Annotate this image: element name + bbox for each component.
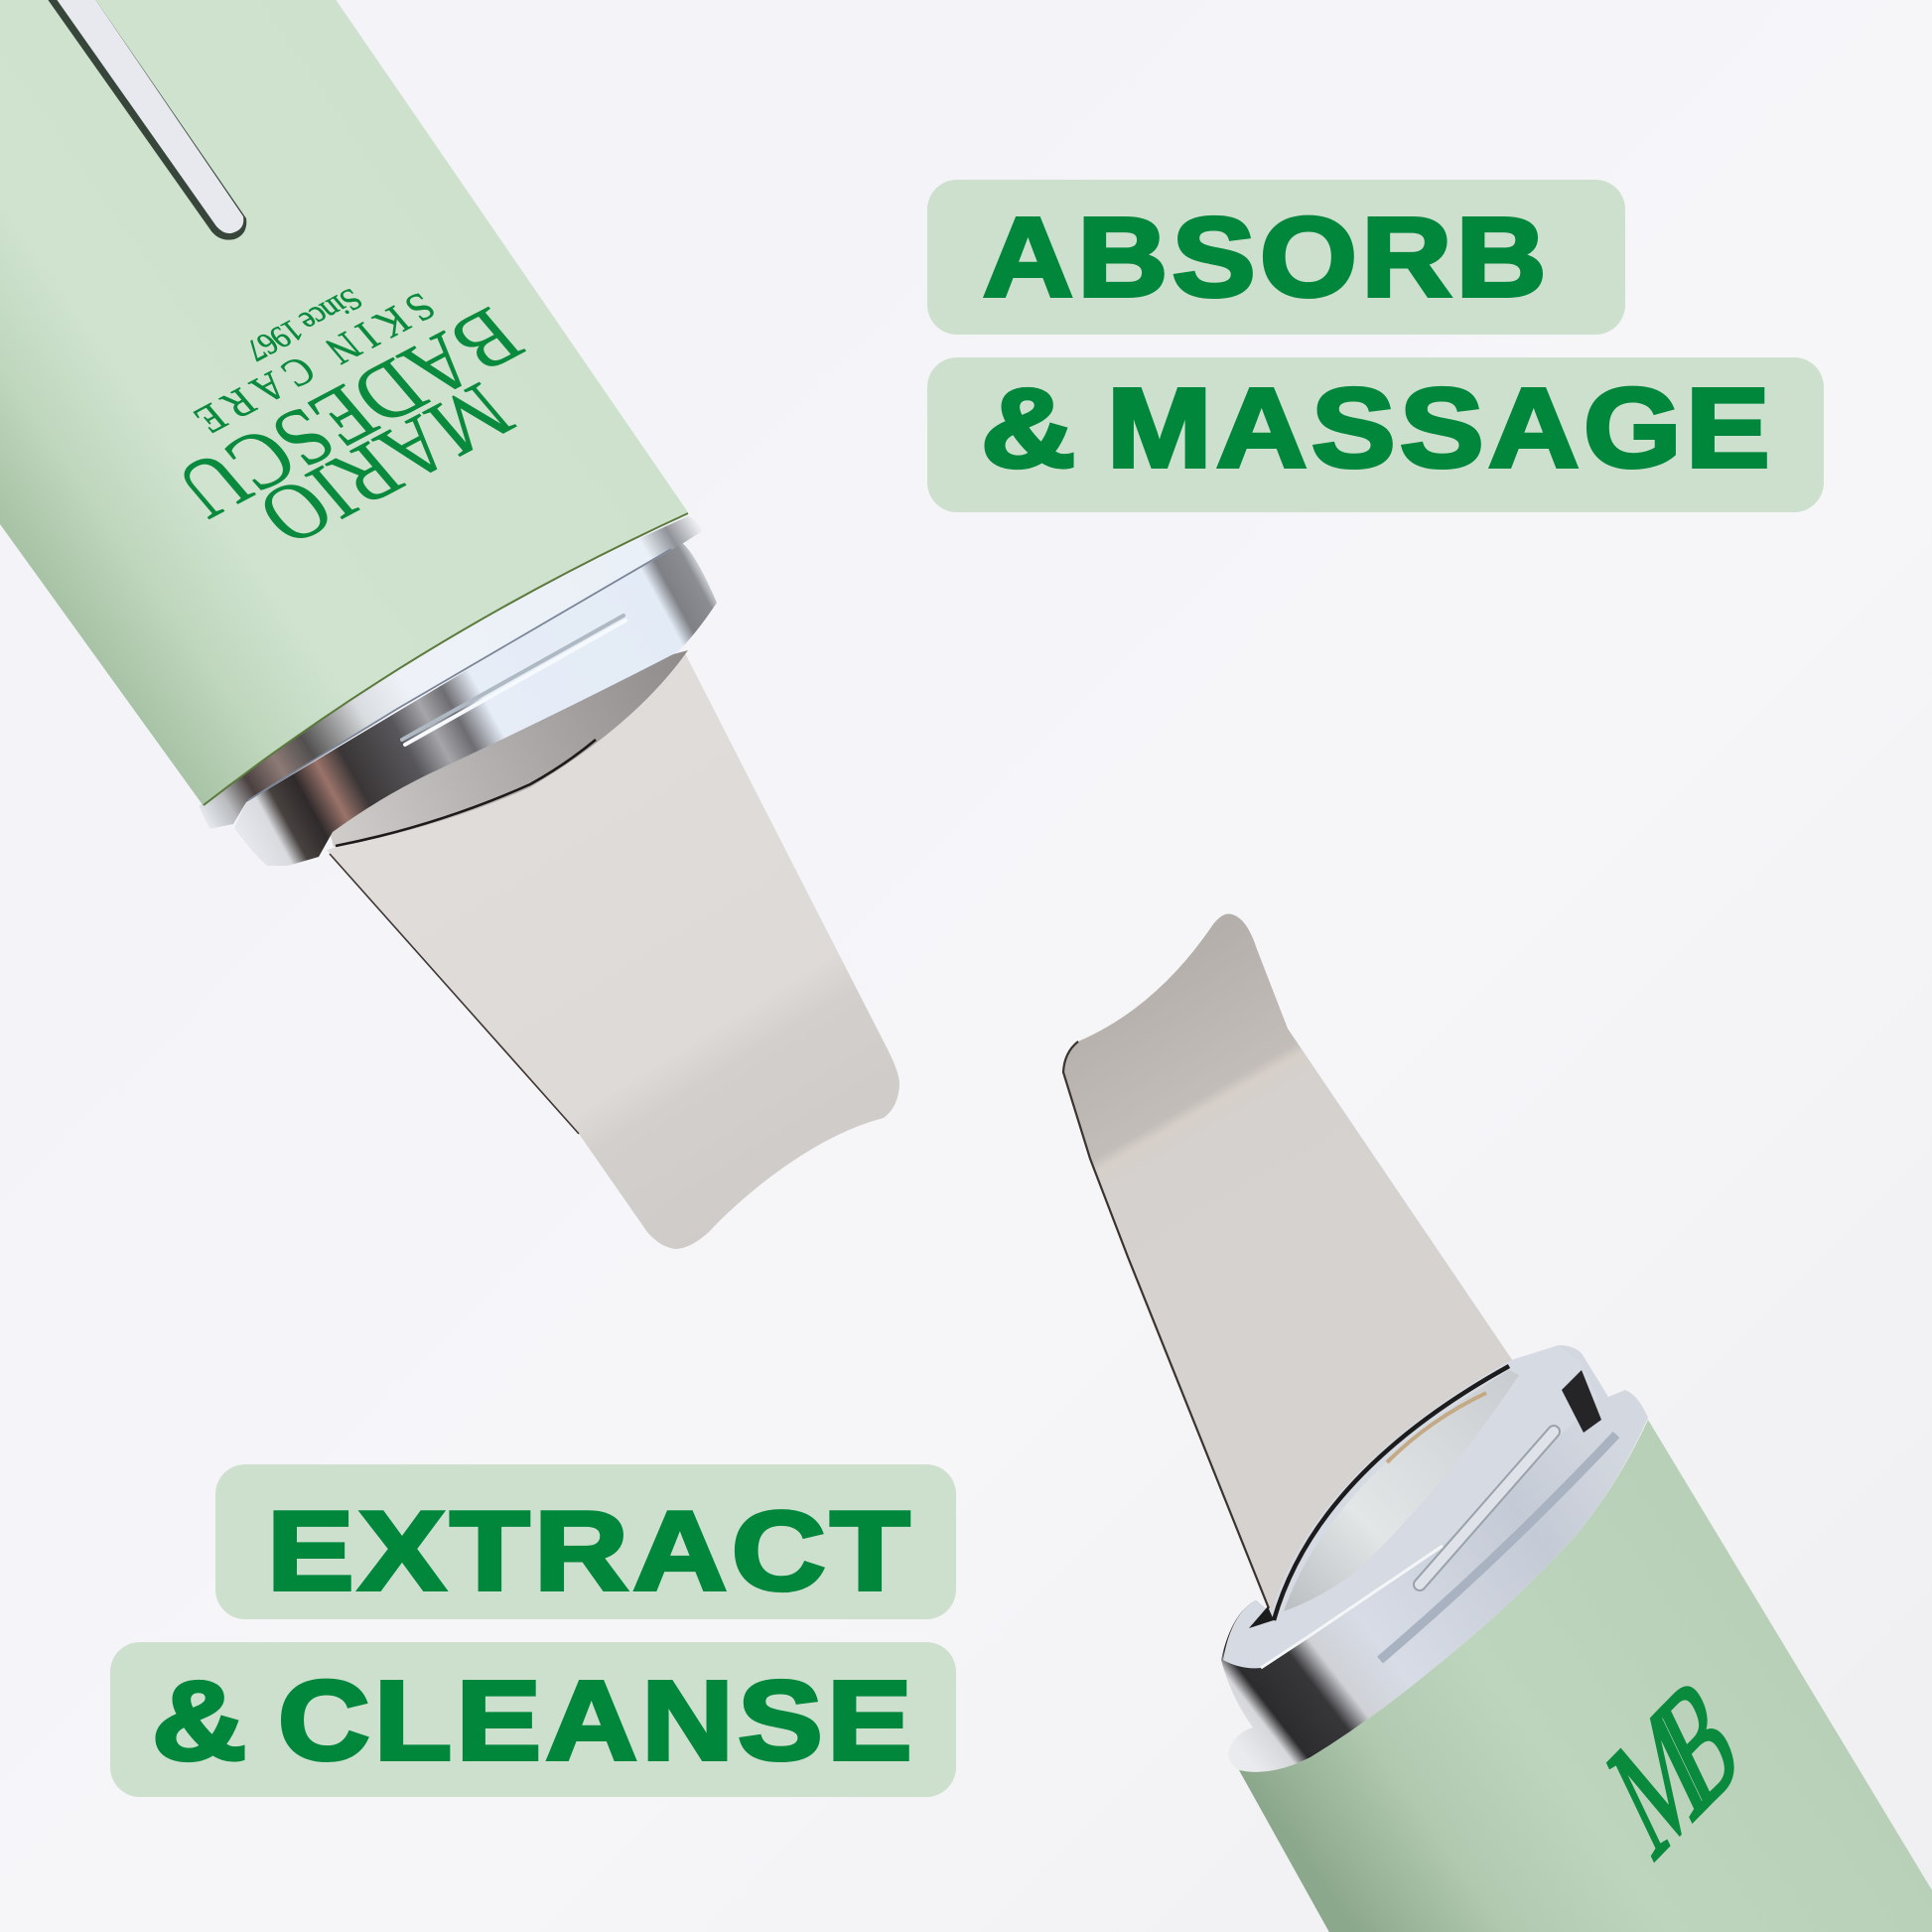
pill: extract: EXTRACT (267, 1488, 914, 1613)
callout: extract and cleanse (110, 1464, 956, 1797)
blade: top-left device (327, 651, 899, 1249)
device body (1239, 1420, 1932, 1932)
logo: MB monogram: B (1636, 1637, 1759, 1848)
blade mount shadow (328, 650, 688, 847)
pill: massage: & (981, 365, 1080, 490)
logo: Mario Badescu Skin Care: Since 1967 (237, 282, 370, 368)
brown reflection (1387, 1393, 1486, 1462)
product: top-left device (0, 0, 899, 1249)
chrome collar (1221, 1345, 1648, 1772)
body edge line (204, 513, 688, 805)
power slot (47, 0, 246, 240)
pill: extract (215, 1464, 956, 1619)
collar groove (1420, 1432, 1554, 1585)
collar groove (402, 616, 623, 740)
device body (0, 0, 688, 806)
neck highlight (1261, 1546, 1443, 1668)
logo: Mario Badescu Skin Care: MARIO (239, 366, 532, 562)
blade notch (1249, 1606, 1274, 1628)
callout: absorb and massage (927, 180, 1824, 512)
chrome collar (199, 516, 717, 866)
lens (1284, 1370, 1519, 1611)
pill: cleanse: CLEANSE (278, 1658, 916, 1783)
pill: cleanse (110, 1642, 956, 1797)
blue band (1380, 1435, 1616, 1660)
top face (1223, 1345, 1598, 1668)
logo: Mario Badescu Skin Care: BADESCU (157, 291, 541, 535)
collar flange (199, 516, 702, 829)
blade seat arc (1274, 1366, 1509, 1620)
product: bottom-right device (1063, 913, 1932, 1932)
pill: massage (927, 357, 1824, 512)
pill: massage: MASSAGE (1107, 365, 1774, 490)
dark corner (1562, 1370, 1601, 1433)
logo: MB monogram: M (1589, 1670, 1727, 1895)
pill: cleanse: & (152, 1658, 251, 1783)
pill: absorb (927, 180, 1625, 335)
logo: Mario Badescu Skin Care (111, 236, 583, 584)
mount shadow line (336, 740, 596, 846)
logo: Mario Badescu Skin Care: SKIN CARE (186, 284, 445, 442)
pill: absorb: ABSORB (983, 195, 1551, 320)
blade: bottom-right device (1063, 913, 1513, 1628)
